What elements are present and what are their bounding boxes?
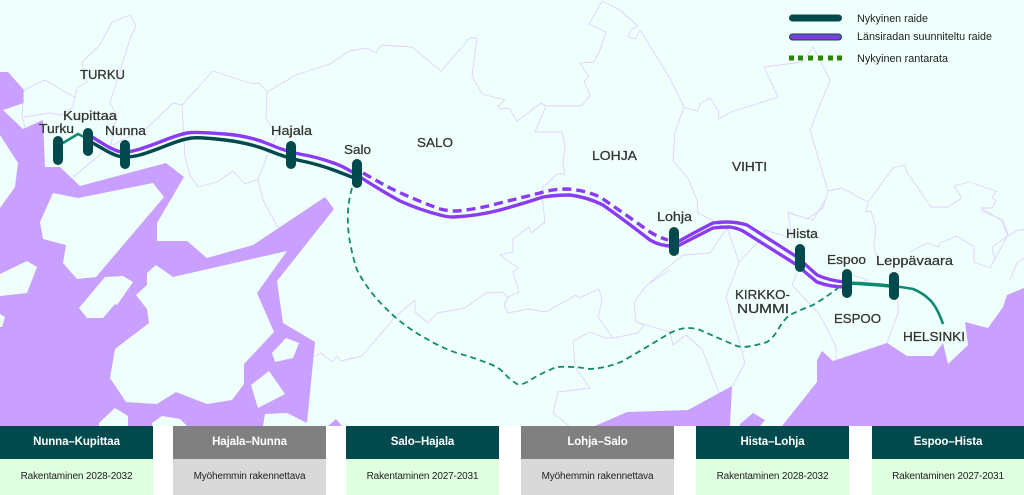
legend swatch: current track [789,14,842,22]
planned track, dashed section [363,173,668,240]
municipality labels [80,68,965,344]
southern inlet [740,413,765,426]
station labels: Turku [39,122,74,136]
municipality labels: TURKU [80,68,125,82]
planned track, Lohja to Espoo [674,222,846,287]
schedule: Salo–Hajala [346,426,499,495]
municipality labels: HELSINKI [903,330,965,344]
current track, Espoo to Leppävaara [847,283,890,286]
current coastal railway [348,188,838,384]
current track, Leppävaara to Helsinki [890,286,943,324]
legend text: current track: Nykyinen raide [857,13,928,25]
legend swatch: coastal railway [789,56,842,60]
station labels: Espoo [827,253,866,267]
schedule: Salo–Hajala: Rakentaminen 2027-2031 [367,471,478,482]
municipality labels: ESPOO [834,312,881,326]
schedule: Espoo–Hista [872,426,1024,495]
eastern gulf [782,288,1024,426]
legend swatch: planned track [790,34,842,40]
southern bay [595,386,732,426]
sea areas [0,72,1024,426]
schedule: Hista–Lohja: Rakentaminen 2028-2032 [717,471,828,482]
current track, Kupittaa to Salo [84,138,357,179]
station labels: Kupittaa [63,109,117,123]
current track, Turku to Kupittaa [58,134,88,145]
schedule: Nunna–Kupittaa: Nunna–Kupittaa [33,436,120,448]
municipality labels: LOHJA [592,149,638,163]
schedule: Hista–Lohja [696,426,849,495]
station labels: Lohja [657,210,692,224]
municipality labels: KIRKKO- [735,288,790,302]
legend text: planned track: Länsiradan suunniteltu raide [857,31,992,43]
schedule: Espoo–Hista: Espoo–Hista [914,436,982,448]
land and islands [0,135,299,426]
municipality labels: VIHTI [732,160,767,174]
western archipelago [0,72,334,426]
schedule: Lohja–Salo: Lohja–Salo [567,436,628,448]
station labels: Hajala [271,124,312,138]
schedule: Hajala–Nunna [173,426,326,495]
station markers [53,128,899,300]
schedule: Nunna–Kupittaa [0,426,153,495]
legend text: coastal railway: Nykyinen rantarata [857,53,949,65]
schedule: Salo–Hajala: Salo–Hajala [391,436,454,448]
station labels [39,109,953,268]
schedule: Nunna–Kupittaa: Rakentaminen 2028-2032 [21,471,132,482]
municipality labels: NUMMI [737,302,789,316]
schedule: Lohja–Salo: Myöhemmin rakennettava [542,471,653,482]
small island of sea [328,419,342,426]
planned track, solid section [84,132,672,246]
station labels: Leppävaara [876,254,953,268]
station labels: Nunna [105,124,146,138]
schedule: Hajala–Nunna: Hajala–Nunna [212,436,287,448]
schedule: Hista–Lohja: Hista–Lohja [740,436,805,448]
station labels: Hista [786,227,818,241]
municipality labels: SALO [417,136,453,150]
schedule: Hajala–Nunna: Myöhemmin rakennettava [194,471,305,482]
legend [789,13,992,65]
schedule: Espoo–Hista: Rakentaminen 2027-2031 [892,471,1004,482]
station labels: Salo [344,143,371,157]
schedule: Lohja–Salo [521,426,674,495]
